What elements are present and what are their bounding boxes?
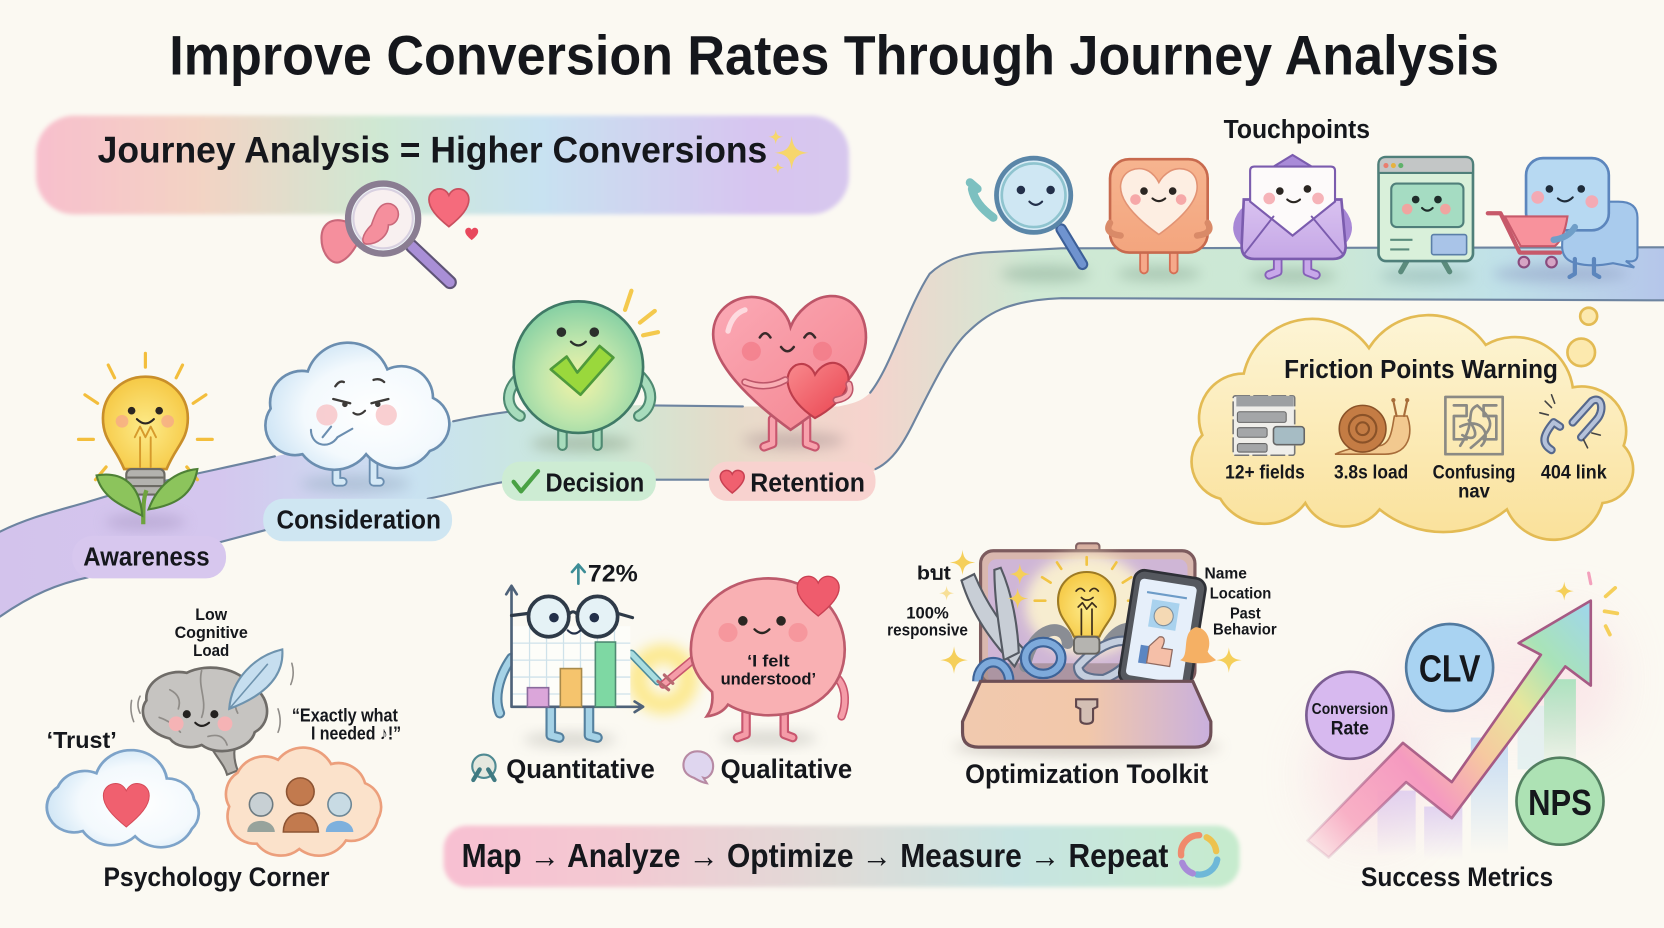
stage label: awareness (72, 536, 226, 578)
banner: journey analysis equals higher conversions: Journey Analysis = Higher Conversions (98, 128, 767, 170)
metric: conversion rate: Rate (1331, 718, 1369, 739)
stage label: consideration (263, 499, 452, 541)
caption: personalization: Name (1204, 565, 1247, 582)
stage label: awareness: Awareness (83, 544, 210, 572)
title: Improve Conversion Rates Through Journey Analysis (169, 24, 1499, 86)
icon: repeat cycle (1181, 835, 1217, 875)
icon: smartphone with thumbs up (1118, 569, 1216, 693)
icon: group in warm cloud (226, 748, 381, 856)
low cognitive load caption: Cognitive (175, 623, 248, 642)
quote: exactly what I needed (292, 706, 401, 744)
metric: conversion rate: Conversion (1312, 701, 1388, 718)
icon: tangled chain (1025, 629, 1142, 679)
sparkles at arrow tip (1555, 573, 1617, 635)
caption: 100 percent responsive (887, 604, 968, 640)
friction heading: Friction Points Warning (1284, 356, 1558, 384)
icon: smiling lightbulb (1035, 557, 1139, 654)
caption: personalization: Location (1210, 586, 1271, 603)
panel: psychology corner (47, 605, 401, 892)
toolbox lid (981, 543, 1195, 683)
caption: personalization: Behavior (1213, 622, 1277, 639)
panel: optimization toolkit (887, 543, 1277, 789)
quote: exactly what I needed: I needed ♪!” (311, 724, 401, 744)
metric: NPS (1516, 758, 1604, 845)
friction label: 12+ fields (1225, 463, 1305, 484)
character: qualitative speech bubble: ‘I felt (747, 651, 790, 670)
banner: map analyze optimize measure repeat loop: Map → Analyze → Optimize → Measure → Repeat (462, 837, 1168, 874)
quote: trust: ‘Trust’ (47, 727, 117, 753)
banner: journey analysis equals higher conversions (36, 116, 849, 214)
soft pink glow (1316, 616, 1613, 838)
stage label: consideration: Consideration (276, 506, 441, 534)
journey path road (0, 247, 1664, 617)
metric: NPS: NPS (1528, 782, 1592, 823)
touchpoint: purple envelope (1237, 155, 1348, 283)
quote: exactly what I needed: “Exactly what (292, 706, 398, 726)
sparkles (939, 550, 1242, 674)
caption: 100 percent responsive: 100% (906, 604, 949, 623)
caption: personalization: Past (1230, 606, 1261, 623)
metric: CLV (1406, 624, 1493, 711)
icon: brain with feather (131, 649, 293, 775)
friction icon: broken link (1540, 395, 1601, 450)
caption: personalization (1204, 565, 1277, 639)
character: retention heart hugging a heart (713, 296, 866, 449)
heading: touchpoints: Touchpoints (1224, 116, 1370, 144)
panel: quantitative and qualitative analysis (472, 561, 852, 784)
character: chart with glasses (497, 586, 658, 747)
stage label: retention: Retention (750, 469, 865, 497)
stage label: decision (502, 462, 656, 501)
character: consideration cloud (265, 343, 449, 492)
friction label: Confusing (1433, 463, 1515, 484)
metric: conversion rate (1306, 672, 1393, 759)
character: qualitative speech bubble (658, 576, 845, 746)
heading: optimization toolkit: Optimization Toolkit (965, 759, 1208, 789)
low cognitive load caption: Low (195, 605, 228, 624)
zigzag growth arrow (1307, 601, 1591, 857)
character: decision ball with checkmark (509, 291, 658, 452)
label: qualitative: Qualitative (721, 754, 852, 784)
low cognitive load caption (175, 605, 248, 660)
character: awareness lightbulb (79, 353, 212, 531)
touchpoint: shopping cart and chat bubbles (1488, 158, 1637, 282)
banner: map analyze optimize measure repeat loop (444, 826, 1240, 887)
icon: scissors (961, 568, 1061, 681)
friction icon: long form (1233, 396, 1304, 455)
metric: CLV: CLV (1419, 647, 1481, 690)
friction label (1433, 463, 1515, 503)
caption: garbled glyph label: bบt (917, 563, 952, 584)
label: quantitative: Quantitative (506, 754, 655, 784)
friction label: 404 link (1541, 463, 1607, 484)
glow behind handshake (638, 654, 689, 705)
friction icon: tangled navigation maze (1445, 397, 1503, 454)
character: qualitative speech bubble: understood’ (721, 669, 816, 688)
panel: success metrics (1306, 573, 1617, 892)
rising bars under arrow (1377, 679, 1576, 860)
stat: up 72 percent: 72% (588, 561, 638, 588)
friction label: nav (1458, 482, 1490, 503)
icon: magnifier with bow and hearts (321, 184, 478, 282)
touchpoint: search magnifier (970, 158, 1090, 282)
touchpoint: browser window (1379, 157, 1473, 283)
icon: trust cloud with heart (47, 750, 199, 847)
low cognitive load caption: Load (193, 641, 229, 660)
touchpoint: orange heart card (1108, 159, 1209, 281)
panel: friction points warning cloud (1192, 308, 1633, 540)
toolbox body (963, 681, 1211, 747)
friction icon: snail (1335, 398, 1410, 454)
stage label: decision: Decision (545, 469, 644, 497)
stage label: retention (709, 462, 876, 501)
friction label: 3.8s load (1334, 463, 1408, 484)
heading: success metrics: Success Metrics (1361, 862, 1553, 892)
caption: 100 percent responsive: responsive (887, 621, 968, 640)
heading: psychology corner: Psychology Corner (103, 862, 330, 892)
